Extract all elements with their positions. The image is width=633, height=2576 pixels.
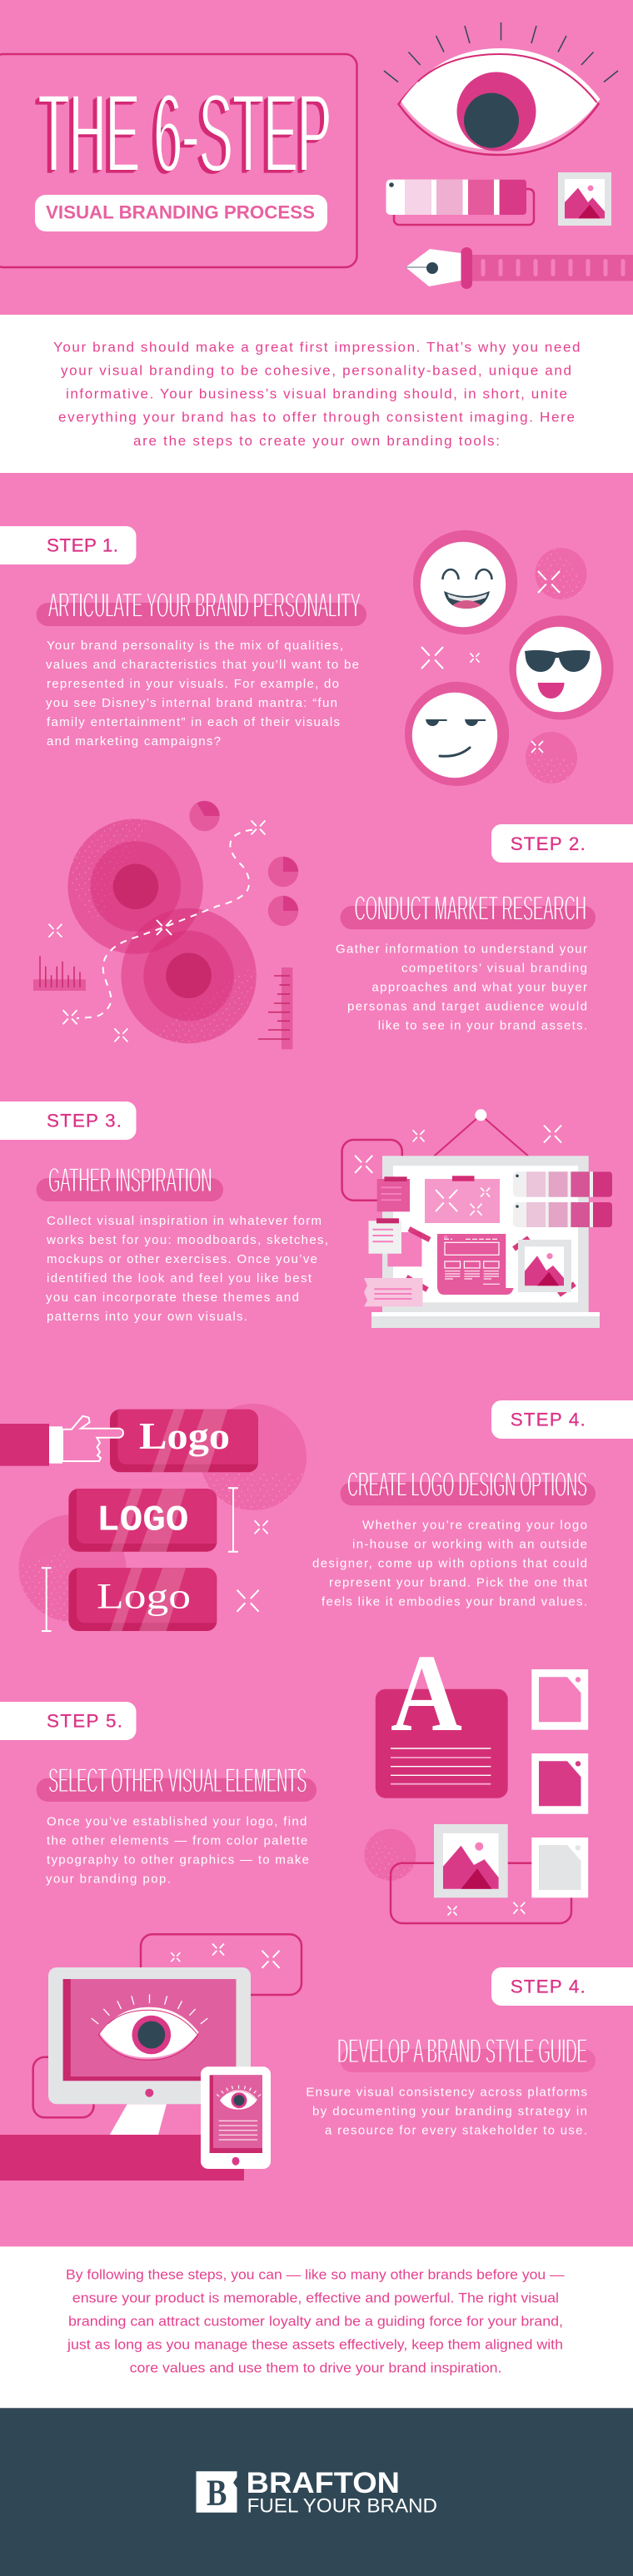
desk: [0, 2135, 244, 2181]
footer background: [0, 2408, 633, 2576]
typography card: [376, 1631, 508, 1798]
file card 1: [531, 1669, 588, 1730]
palette cards: [513, 1171, 612, 1227]
step 2 text: personas and target audience would: [347, 999, 587, 1013]
x marks: [448, 1902, 525, 1915]
document mockup: [437, 1234, 513, 1295]
panel: step 3: [0, 1102, 612, 1328]
back frames: [33, 1934, 302, 2117]
panel: intro: [0, 315, 633, 473]
intro text: Your brand should make a great first impression. That’s why you need: [53, 340, 580, 355]
step 5 text: Once you’ve established your logo, find: [47, 1814, 307, 1828]
panel: step 4 logo options: [0, 1400, 633, 1631]
step 3 heading: [37, 1160, 223, 1201]
torn note: [364, 1278, 423, 1306]
step 2 text: approaches and what your buyer: [371, 980, 587, 994]
step 3 text: you can incorporate these themes and: [46, 1290, 299, 1305]
step 3 label: [0, 1102, 137, 1140]
rounded frame: [342, 1140, 402, 1201]
step 1 text: family entertainment” in each of their visuals: [47, 715, 340, 729]
file card 3: [531, 1838, 588, 1897]
monitor stand: [110, 2104, 167, 2135]
step 3 text: [46, 1214, 328, 1324]
panel: header: [0, 22, 633, 289]
step 4 text: designer, come up with options that could: [312, 1556, 587, 1570]
step 5 text: [46, 1814, 309, 1886]
step 1 text: values and characteristics that you’ll want to be: [46, 658, 359, 672]
file card 2: [531, 1753, 588, 1814]
title: [34, 72, 331, 199]
intro text: informative. Your business’s visual branding should, in short, unite: [66, 386, 567, 401]
step 5 label: STEP 5.: [47, 1711, 122, 1732]
step 2 text: like to see in your brand assets.: [378, 1018, 587, 1032]
step 3 text: Collect visual inspiration in whatever form: [47, 1214, 321, 1228]
picture card: [434, 1824, 508, 1897]
phone eye: [217, 2086, 261, 2111]
step label: [491, 1967, 633, 2006]
step label: STEP 4.: [511, 1977, 586, 1997]
step 4 text: in-house or working with an outside: [352, 1537, 587, 1551]
step 2 text: competitors’ visual branding: [401, 961, 587, 975]
step 1 text: you see Disney’s internal brand mantra: “fun: [46, 696, 337, 710]
closing text: By following these steps, you can — like so many other brands before you —: [66, 2266, 565, 2282]
closing text: branding can attract customer loyalty and be a guiding force for your brand,: [68, 2313, 563, 2329]
header frame: [0, 54, 356, 267]
panel: step 3: GATHER INSPIRATION: [48, 1160, 212, 1199]
icon: picture: [558, 172, 611, 226]
dimension markers: [42, 1488, 238, 1631]
board: [382, 1156, 589, 1312]
step 2 text: Gather information to understand your: [336, 942, 587, 956]
closing text: core values and use them to drive your brand inspiration.: [130, 2360, 501, 2375]
subtitle pill: VISUAL BRANDING PROCESS: [46, 201, 315, 223]
step 1 text: and marketing campaigns?: [47, 734, 221, 748]
brafton logo mark: B: [207, 2472, 227, 2513]
step 4 text: Whether you’re creating your logo: [362, 1518, 587, 1532]
speckled circle: [365, 1829, 416, 1881]
step 1 text: Your brand personality is the mix of qualities,: [47, 639, 343, 653]
step 3 label: STEP 3.: [47, 1111, 122, 1131]
step 1 text: represented in your visuals. For example, do: [47, 677, 339, 691]
intro text: are the steps to create your own branding tools:: [133, 433, 500, 449]
pink square note: [387, 1232, 421, 1266]
closing text: just as long as you manage these assets effectively, keep them aligned with: [67, 2336, 563, 2352]
white note: [368, 1218, 401, 1254]
ruler: [258, 967, 292, 1049]
step 3 text: works best for you: moodboards, sketches,: [46, 1233, 328, 1247]
logo button 3: Logo: [97, 1578, 191, 1617]
logo button 2: LOGO: [97, 1500, 188, 1542]
closing text: [66, 2266, 565, 2375]
tapes: [406, 1229, 575, 1295]
brafton wordmark: BRAFTON: [247, 2467, 400, 2499]
framed picture: [518, 1240, 571, 1292]
step 1 heading: [37, 585, 366, 626]
step 4 label: [491, 1400, 633, 1439]
sunglasses face: [509, 615, 614, 720]
icon: eye: [384, 22, 618, 155]
chart: concentric target circles: [67, 818, 257, 1043]
speckled circle bottom: [526, 732, 577, 786]
step 4 text: [312, 1518, 588, 1609]
step 2 label: STEP 2.: [511, 833, 586, 854]
step 3 text: mockups or other exercises. Once you’ve: [47, 1252, 317, 1266]
bar chart: [33, 956, 86, 991]
step 5 text: typography to other graphics — to make: [47, 1852, 309, 1867]
logo button 1: [110, 1410, 258, 1472]
x marks: [421, 647, 480, 669]
step 1 text: [46, 639, 359, 748]
intro text: [53, 340, 580, 449]
tagline: FUEL YOUR BRAND: [247, 2494, 437, 2517]
body text: Ensure visual consistency across platforms: [306, 2085, 587, 2099]
body text: a resource for every stakeholder to use.: [325, 2123, 587, 2137]
phone: [201, 2066, 271, 2169]
intro text: everything your brand has to offer through consistent imaging. Here: [58, 410, 575, 425]
panel: footer: [0, 2408, 633, 2576]
smirking face: [405, 682, 509, 786]
intro text: your visual branding to be cohesive, personality-based, unique and: [61, 363, 571, 378]
icon: fountain pen: [406, 247, 633, 289]
step 5 heading: [37, 1761, 316, 1802]
pinned pink note: [425, 1176, 500, 1223]
icon: colour palette: [386, 180, 534, 225]
icon: faces illustration: [405, 530, 614, 786]
step 5 text: your branding pop.: [46, 1872, 171, 1886]
shelf: [371, 1312, 600, 1328]
step 2 label: [491, 824, 633, 863]
speckled circle top: [535, 548, 586, 600]
smiling face: [413, 530, 517, 634]
body text: [306, 2085, 587, 2137]
moodboard illustration: [342, 1109, 612, 1328]
intro background: [0, 315, 633, 473]
step 3 text: patterns into your own visuals.: [47, 1310, 247, 1324]
icon: pointing hand: [0, 1416, 123, 1466]
monitor eye: [92, 1994, 207, 2060]
logo button 1: Logo: [139, 1415, 230, 1457]
pie icons: [189, 801, 298, 926]
panel: step 5: [0, 1631, 588, 1923]
closing text: ensure your product is memorable, effective and powerful. The right visual: [72, 2290, 559, 2305]
step 5 text: the other elements — from color palette: [47, 1833, 307, 1847]
background circles: [18, 1404, 307, 1622]
step 4 text: feels like it embodies your brand values.: [321, 1594, 587, 1609]
dashed route: [77, 830, 252, 1018]
x marks: [237, 1520, 268, 1612]
x marks: [171, 1943, 280, 1968]
step 4 text: represent your brand. Pick the one that: [329, 1575, 588, 1589]
panel: step 2: [33, 801, 633, 1049]
step 5 label: [0, 1702, 137, 1740]
step 3 text: identified the look and feel you like best: [47, 1271, 312, 1286]
subtitle pill: [35, 195, 327, 231]
brafton logo mark: [197, 2471, 237, 2513]
closing background: [0, 2246, 633, 2408]
typography card: A: [391, 1631, 462, 1754]
body text: by documenting your branding strategy in: [312, 2104, 587, 2118]
step 4 label: STEP 4.: [511, 1409, 586, 1430]
step 1 label: STEP 1.: [47, 535, 118, 556]
logo button 2: [68, 1489, 217, 1552]
monitor: [48, 1967, 251, 2104]
logo button 3: [68, 1568, 217, 1631]
step 1 label: [0, 526, 137, 564]
panel: step 5: SELECT OTHER VISUAL ELEMENTS: [48, 1761, 307, 1800]
step 2 text: [336, 942, 587, 1032]
panel: closing: [0, 2246, 633, 2408]
route x marks: [48, 821, 266, 1042]
panel: step 6 brand style guide: [0, 1934, 633, 2181]
floating x marks: [413, 1126, 561, 1142]
dark note: [377, 1176, 410, 1211]
panel: step 1: [0, 526, 614, 786]
hanger: [435, 1109, 528, 1156]
outline frame: [391, 1863, 571, 1923]
